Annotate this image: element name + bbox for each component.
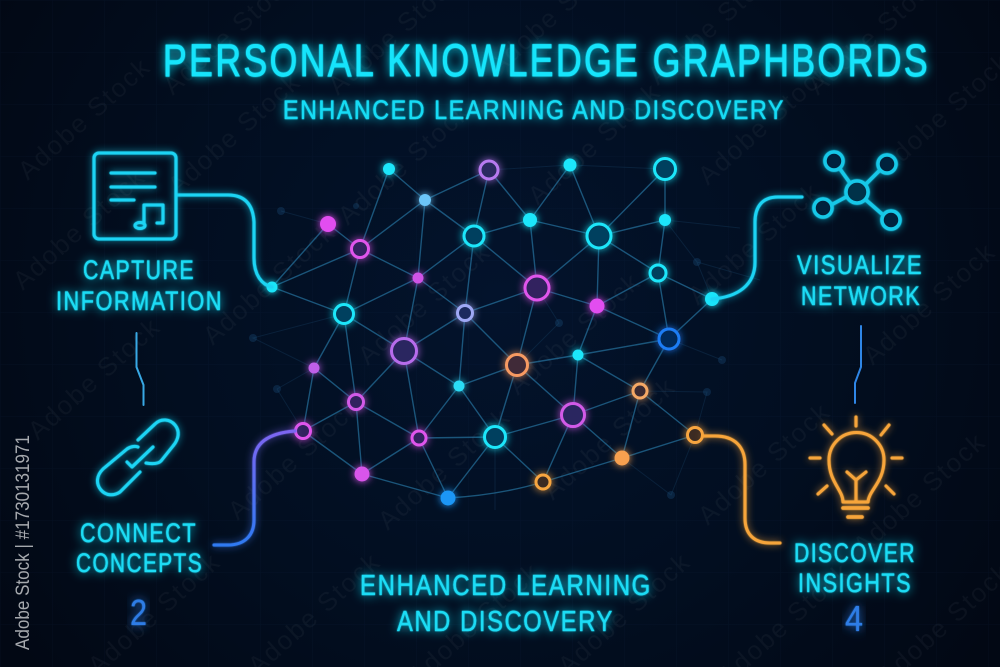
footer caption	[360, 570, 652, 638]
stock watermarks: Adobe Stock	[692, 396, 836, 530]
stock watermarks: Adobe Stock	[7, 161, 151, 295]
icon: network	[814, 152, 900, 229]
connector: connect concepts to graph	[214, 431, 295, 545]
step number 2: 2	[130, 592, 147, 633]
step number 4: 4	[845, 598, 863, 639]
icon: chain link	[97, 420, 178, 495]
stock watermarks: Adobe Stock	[162, 66, 306, 200]
stock watermarks: Adobe Stock	[692, 56, 836, 190]
connector: graph to visualize	[712, 197, 802, 299]
connector: graph to insights	[703, 436, 780, 543]
stock watermarks: Adobe Stock	[352, 236, 496, 370]
arrow: capture to connect	[136, 333, 144, 405]
network graph	[249, 158, 760, 510]
ring nodes	[296, 158, 702, 489]
label: visualize network	[797, 250, 923, 311]
label: visualize network: NETWORK	[801, 281, 921, 311]
faint edges	[253, 165, 760, 510]
stock watermarks: Adobe Stock	[12, 51, 156, 185]
label: connect concepts: CONCEPTS	[76, 548, 203, 578]
filled nodes	[266, 158, 719, 506]
label: connect concepts: CONNECT	[80, 518, 197, 548]
footer caption: ENHANCED LEARNING	[360, 570, 652, 602]
label: visualize network: VISUALIZE	[797, 250, 923, 280]
label: capture information: INFORMATION	[56, 286, 223, 316]
stock watermarks: Adobe Stock	[537, 371, 681, 505]
graph edges	[272, 165, 712, 498]
label: discover insights	[794, 538, 916, 598]
stock watermarks: Adobe Stock	[197, 216, 341, 350]
label: capture information	[56, 255, 223, 316]
footer caption: AND DISCOVERY	[397, 606, 614, 638]
icon: light bulb	[810, 417, 902, 517]
label: discover insights: INSIGHTS	[798, 568, 912, 598]
connector: capture to graph	[178, 195, 272, 287]
stock watermarks: Adobe Stock	[857, 236, 1000, 370]
stock watermarks: Adobe Stock	[332, 96, 476, 230]
stock watermarks: Adobe Stock	[522, 76, 666, 210]
label: connect concepts	[76, 518, 203, 578]
stock id side text: Adobe Stock | #1730131971	[13, 435, 34, 650]
label: capture information: CAPTURE	[83, 255, 195, 285]
stock watermarks: Adobe Stock	[22, 311, 166, 445]
subtitle: ENHANCED LEARNING AND DISCOVERY	[283, 95, 785, 125]
label: discover insights: DISCOVER	[794, 538, 916, 568]
stock watermarks: Adobe Stock	[502, 266, 646, 400]
stock watermarks: Adobe Stock	[847, 426, 991, 560]
stock watermarks: Adobe Stock	[222, 391, 366, 525]
stock watermarks: Adobe Stock	[372, 401, 516, 535]
arrow: visualize to insights	[855, 326, 861, 403]
dim background nodes	[249, 203, 726, 499]
stock watermarks: Adobe Stock	[682, 176, 826, 310]
icon: document with music note	[94, 153, 176, 239]
